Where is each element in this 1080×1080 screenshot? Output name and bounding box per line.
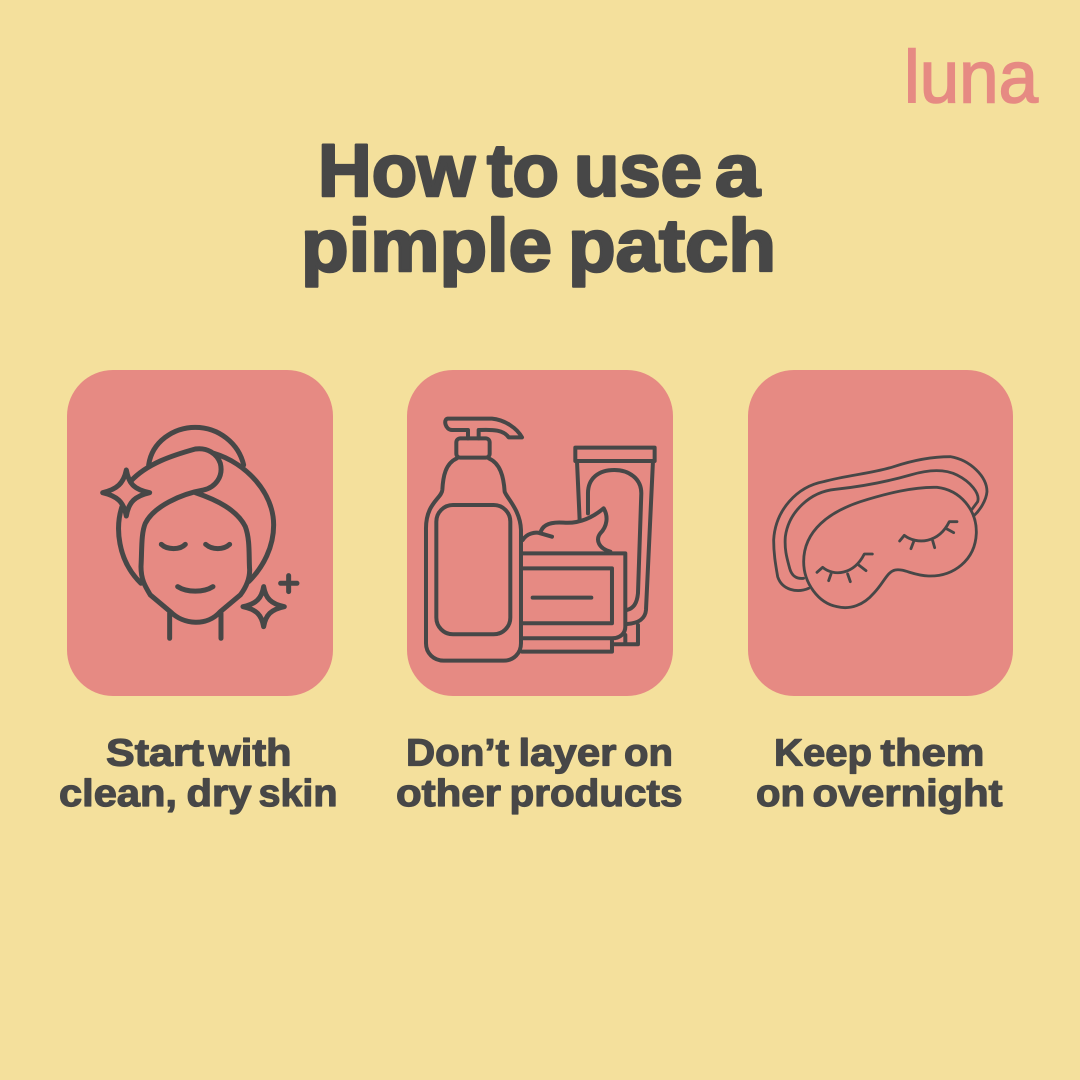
- logo: luna: luna: [904, 36, 1039, 118]
- icon: face with towel and sparkles: [103, 427, 297, 638]
- icon: bottle, jar and tube: [426, 419, 655, 661]
- label: step 1: with: [207, 732, 292, 774]
- panel: products: [407, 370, 673, 696]
- label: step 2: Don’t: [406, 732, 509, 774]
- label: step 1: [59, 732, 338, 815]
- title: How: [318, 129, 475, 212]
- label: step 2: other: [396, 773, 501, 815]
- label: step 2: layer: [518, 732, 617, 774]
- title: patch: [568, 204, 776, 287]
- panel: overnight: [748, 370, 1013, 696]
- label: step 3: Keep: [774, 732, 872, 774]
- icon: sleep mask: [774, 457, 987, 608]
- title: use: [574, 129, 702, 212]
- label: step 2: products: [510, 773, 682, 815]
- label: step 2: on: [624, 732, 673, 774]
- label: step 3: them: [880, 732, 984, 774]
- label: step 1: clean,: [59, 773, 177, 815]
- label: step 3: on: [756, 773, 805, 815]
- label: step 2: [396, 732, 682, 815]
- label: step 1: dry: [186, 773, 252, 815]
- label: step 1: skin: [258, 773, 338, 815]
- title: pimple: [301, 204, 552, 287]
- label: step 1: Start: [106, 732, 204, 774]
- title: to: [487, 129, 559, 212]
- label: step 3: overnight: [812, 773, 1003, 815]
- label: step 3: [756, 732, 1003, 815]
- panel: clean skin: [67, 370, 333, 696]
- title: a: [715, 129, 761, 212]
- title: [301, 129, 776, 287]
